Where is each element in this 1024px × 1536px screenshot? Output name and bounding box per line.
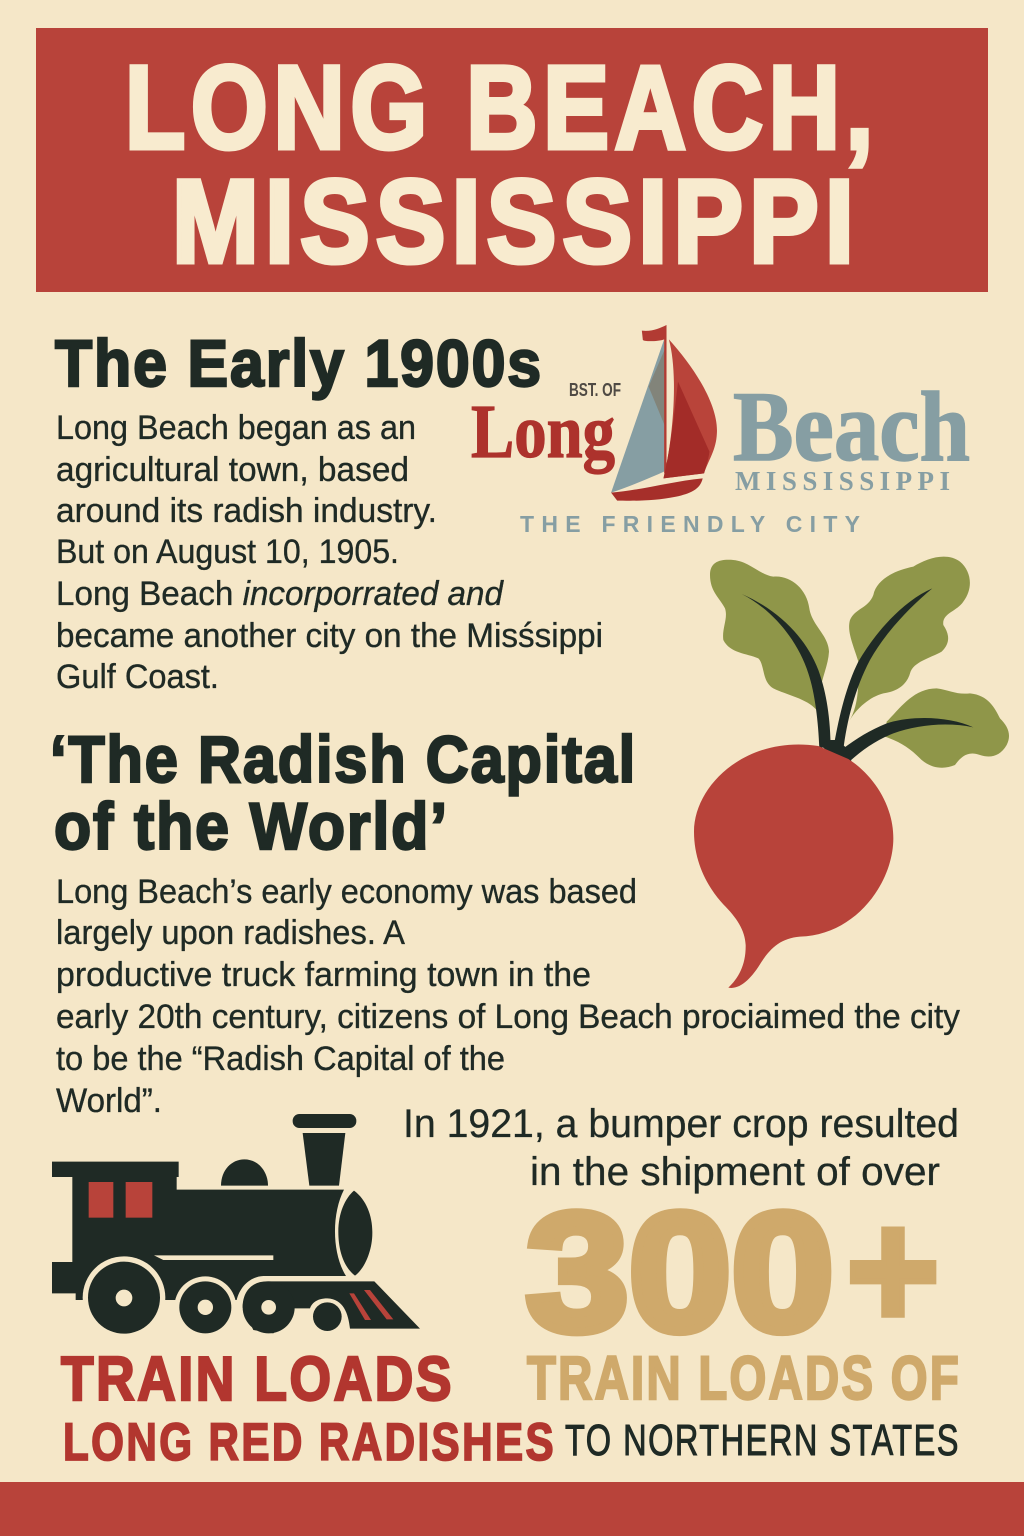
footer bar — [0, 1482, 1024, 1536]
logo text: mississippi: MISSISSIPPI — [735, 466, 950, 496]
text block: bumper crop — [403, 1102, 959, 1194]
running board — [154, 1255, 273, 1260]
text block: bumper crop: in the shipment of over — [530, 1150, 940, 1194]
icon: sailboat — [611, 325, 717, 501]
logo: long beach mississippi — [471, 325, 970, 537]
title: LONG BEACH, — [125, 42, 879, 174]
windows — [89, 1182, 152, 1218]
logo text: est. of: BST. OF — [569, 380, 621, 400]
title — [125, 42, 879, 288]
right leaf — [885, 688, 1009, 768]
big number: 300+: 300 — [526, 1178, 834, 1366]
heading: the early 1900s: The Early 1900s — [55, 326, 543, 400]
text block: radish capital: World”. — [56, 1082, 162, 1120]
text block: early 1900s: Long Beach incorporrated and — [56, 575, 505, 613]
left leaf — [710, 560, 829, 710]
text block: bumper crop: In 1921, a bumper crop resulted — [403, 1102, 959, 1146]
text block: early 1900s: became another city on the Misśsippi — [56, 617, 603, 655]
heading: radish capital: of the World’ — [54, 789, 449, 863]
logo text: the friendly city: THE FRIENDLY CITY — [520, 511, 860, 537]
big number: 300+: + — [846, 1176, 940, 1364]
body — [52, 1162, 346, 1300]
logo text: beach: Beach — [733, 371, 970, 482]
text block: early 1900s — [56, 409, 603, 696]
boiler front — [338, 1191, 372, 1276]
wheel clearances — [83, 1256, 236, 1339]
heading: radish capital — [50, 722, 637, 863]
text block: radish capital: Long Beach’s early economy was based — [56, 873, 637, 911]
steam dome — [221, 1159, 268, 1186]
root — [694, 744, 893, 988]
middle leaf — [849, 557, 970, 720]
text block: radish capital: productive truck farming town in the — [56, 956, 591, 994]
heading: radish capital: ‘The Radish Capital — [50, 722, 637, 796]
pilot — [243, 1281, 420, 1333]
logo text: long: Long — [471, 390, 615, 474]
big number: 300+ — [526, 1176, 940, 1366]
text block: early 1900s: Gulf Coast. — [56, 658, 219, 696]
smokestack — [293, 1114, 356, 1186]
title: MISSISSIPPI — [172, 156, 860, 288]
text block: radish capital — [56, 873, 961, 1120]
text block: early 1900s: around its radish industry. — [56, 492, 437, 530]
text block: early 1900s: agricultural town, based — [56, 451, 409, 489]
title banner — [36, 28, 988, 292]
label: long red radishes: LONG RED RADISHES — [63, 1413, 556, 1472]
cowcatcher stripes — [349, 1290, 393, 1320]
text block: radish capital: largely upon radishes. A — [56, 914, 405, 952]
wheels — [88, 1262, 342, 1334]
text block: radish capital: to be the “Radish Capital of the — [56, 1040, 505, 1078]
text block: early 1900s: But on August 10, 1905. — [56, 533, 399, 571]
stems — [742, 588, 973, 762]
icon: radish — [694, 557, 1009, 988]
label: train loads: TRAIN LOADS — [61, 1345, 454, 1414]
text block: early 1900s: Long Beach began as an — [56, 409, 416, 447]
text block: radish capital: early 20th century, citizens of Long Beach prociaimed the city — [56, 998, 961, 1036]
icon: locomotive — [52, 1114, 420, 1339]
